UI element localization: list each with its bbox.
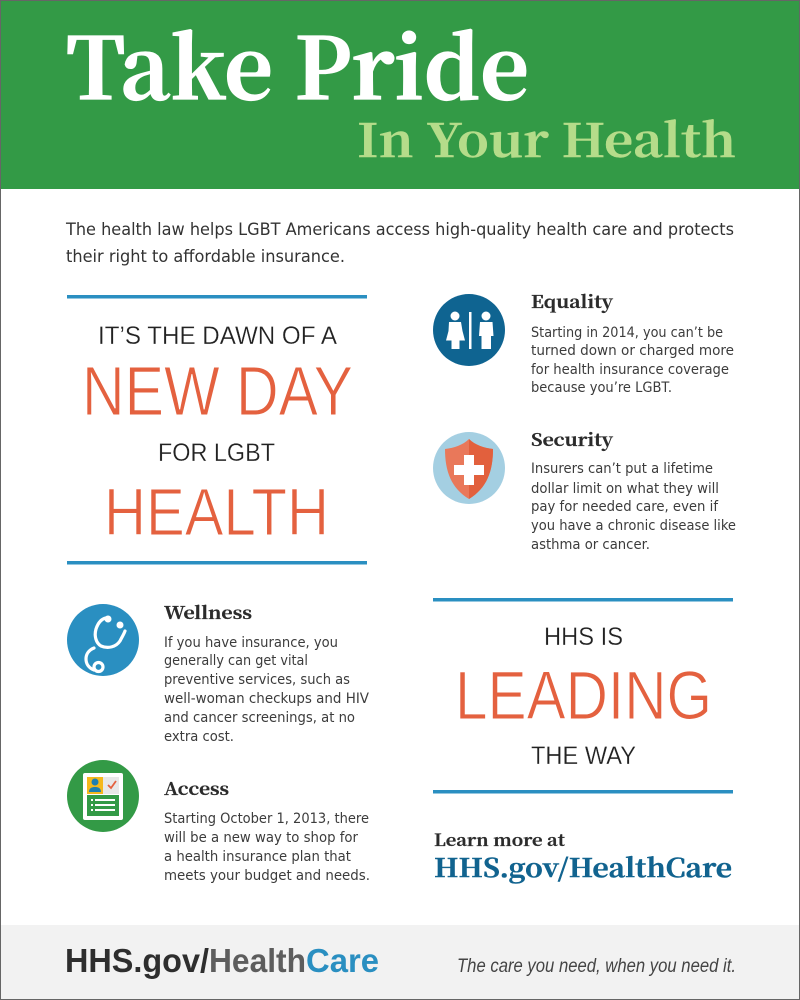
footer tagline: The care you need, when you need it. bbox=[457, 956, 736, 977]
equality text: Starting in 2014, you can’t be bbox=[531, 325, 723, 341]
equality text: Equality bbox=[531, 289, 614, 314]
wellness text: preventive services, such as bbox=[164, 672, 350, 688]
intro text: their right to affordable insurance. bbox=[66, 246, 345, 266]
security text: you have a chronic disease like bbox=[531, 518, 736, 534]
equality text: for health insurance coverage bbox=[531, 362, 729, 378]
footer logo: Health bbox=[209, 942, 306, 979]
callout: HHS is leading the way: HHS IS bbox=[544, 623, 623, 651]
wellness text: generally can get vital bbox=[164, 653, 308, 669]
learn more link: HHS.gov/HealthCare bbox=[434, 849, 732, 885]
intro text: The health law helps LGBT Americans access high-quality health care and protects bbox=[65, 219, 734, 239]
security text: asthma or cancer. bbox=[531, 537, 650, 553]
wellness text: well-woman checkups and HIV bbox=[164, 691, 369, 707]
callout: HHS is leading the way: LEADING bbox=[455, 657, 712, 734]
icon: equality restroom figures bbox=[433, 294, 505, 366]
footer logo: Care bbox=[306, 942, 379, 979]
icon: access form bbox=[67, 760, 139, 832]
header banner bbox=[0, 0, 800, 189]
subtitle: In Your Health bbox=[357, 105, 736, 171]
equality text: turned down or charged more bbox=[531, 343, 734, 359]
callout: new day for LGBT health: NEW DAY bbox=[82, 352, 353, 430]
title: Take Pride bbox=[66, 2, 529, 124]
access text: meets your budget and needs. bbox=[164, 868, 370, 884]
access text: a health insurance plan that bbox=[164, 849, 351, 865]
equality text: because you’re LGBT. bbox=[531, 380, 672, 396]
wellness text: If you have insurance, you bbox=[164, 635, 338, 651]
access text bbox=[164, 776, 370, 884]
callout: new day for LGBT health: IT’S THE DAWN OF A bbox=[98, 322, 337, 350]
callout: new day for LGBT health: HEALTH bbox=[104, 475, 329, 550]
callout: new day for LGBT health bbox=[67, 295, 367, 564]
icon: wellness stethoscope bbox=[67, 604, 139, 676]
callout: new day for LGBT health: FOR LGBT bbox=[158, 439, 275, 467]
footer logo: HHS.gov/ bbox=[65, 942, 209, 979]
security text bbox=[531, 427, 736, 553]
access text: Starting October 1, 2013, there bbox=[164, 811, 369, 827]
wellness text: and cancer screenings, at no bbox=[164, 710, 355, 726]
wellness text bbox=[164, 600, 369, 745]
icon: security shield bbox=[433, 432, 505, 504]
equality text bbox=[531, 289, 734, 396]
security text: pay for needed care, even if bbox=[531, 499, 719, 515]
learn more link: Learn more at bbox=[434, 827, 566, 851]
security text: Insurers can’t put a lifetime bbox=[531, 461, 713, 477]
intro text bbox=[65, 219, 734, 266]
wellness text: extra cost. bbox=[164, 729, 234, 745]
footer logo bbox=[65, 942, 379, 979]
access text: will be a new way to shop for bbox=[164, 830, 358, 846]
callout: HHS is leading the way: THE WAY bbox=[531, 742, 636, 770]
footer band bbox=[0, 925, 800, 1000]
access text: Access bbox=[164, 776, 229, 801]
security text: dollar limit on what they will bbox=[531, 481, 719, 497]
wellness text: Wellness bbox=[164, 600, 252, 625]
callout: HHS is leading the way bbox=[433, 598, 733, 794]
learn more link bbox=[434, 827, 732, 885]
security text: Security bbox=[531, 427, 614, 452]
